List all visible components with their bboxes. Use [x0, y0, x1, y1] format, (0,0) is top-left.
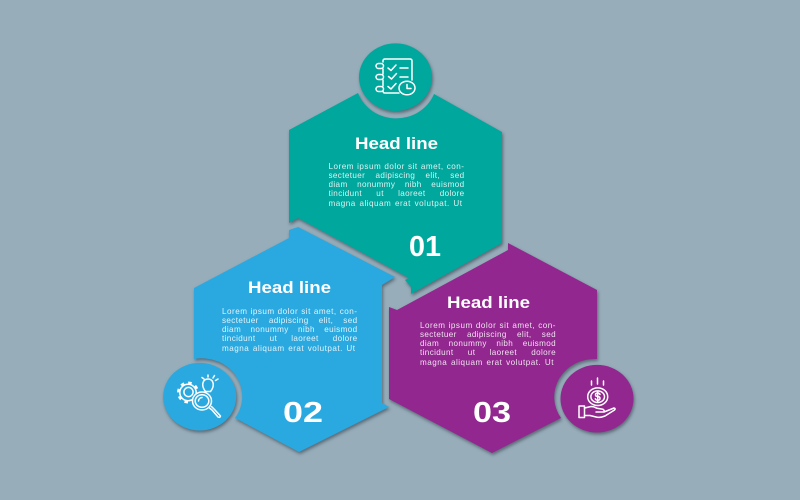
teal hexagon — [289, 93, 502, 294]
body text 02: Lorem ipsum dolor sit amet, con- — [222, 307, 358, 316]
heading 02: Head line — [248, 278, 331, 297]
number 02: 02 — [283, 397, 323, 429]
panel: step 03 — [389, 243, 634, 453]
icon badge: coin in hand — [560, 365, 634, 433]
body text 02: diam nonummy nibh euismod — [222, 325, 358, 334]
body text 03 — [420, 321, 556, 368]
body text 02: magna aliquam erat volutpat. Ut — [222, 344, 356, 353]
body text 03: diam nonummy nibh euismod — [420, 339, 556, 348]
icon badge: checklist — [359, 43, 432, 111]
heading 03: Head line — [447, 293, 530, 312]
body text 01: magna aliquam erat volutpat. Ut — [328, 199, 462, 208]
body text 03: magna aliquam erat volutpat. Ut — [420, 358, 554, 367]
body text 01 — [328, 162, 464, 209]
body text 02: sectetuer adipiscing elit, sed — [222, 316, 358, 325]
purple hexagon — [389, 243, 597, 453]
body text 01: diam nonummy nibh euismod — [328, 180, 464, 189]
body text 02: tincidunt ut laoreet dolore — [222, 334, 358, 343]
body text 02 — [222, 307, 358, 354]
body text 03: tincidunt ut laoreet dolore — [420, 348, 556, 357]
body text 01: tincidunt ut laoreet dolore — [328, 189, 464, 198]
icon badge: gear and magnifier — [163, 363, 236, 431]
number 03: 03 — [473, 397, 511, 429]
heading 01: Head line — [355, 134, 438, 153]
body text 03: Lorem ipsum dolor sit amet, con- — [420, 321, 556, 330]
panel: step 02 — [163, 227, 395, 452]
panel: step 01 — [289, 43, 502, 294]
body text 01: Lorem ipsum dolor sit amet, con- — [328, 162, 464, 171]
body text 01: sectetuer adipiscing elit, sed — [328, 171, 464, 180]
blue hexagon — [194, 227, 395, 452]
body text 03: sectetuer adipiscing elit, sed — [420, 330, 556, 339]
number 01: 01 — [409, 231, 441, 263]
